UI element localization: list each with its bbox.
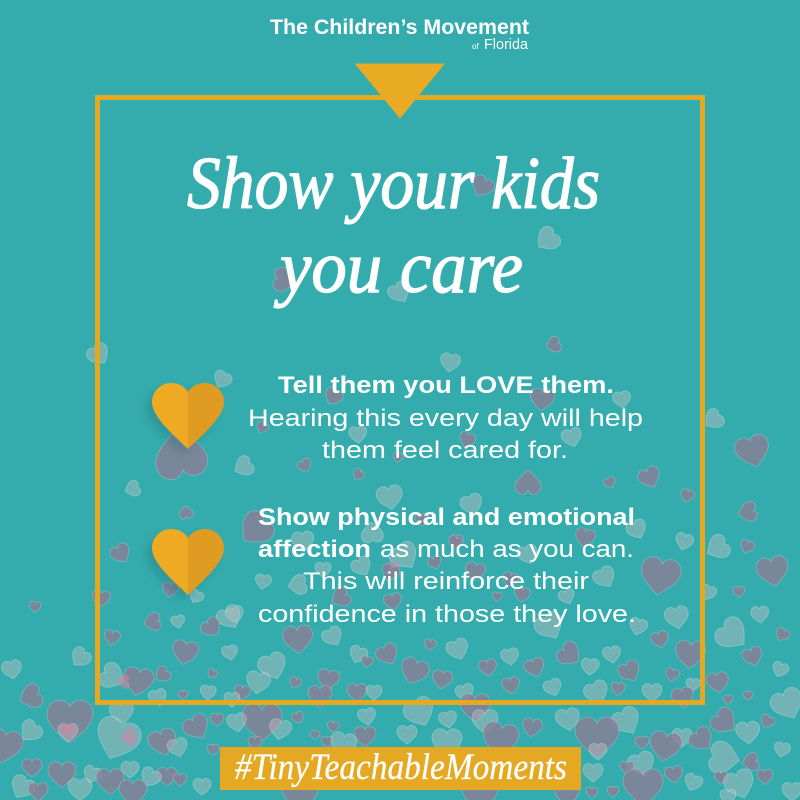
icon: gold paper heart 1 [146, 383, 224, 455]
logo: The Children's Movement of Florida: Florida [484, 36, 529, 53]
tip 1 text: Hearing this every day will help [248, 405, 643, 432]
hashtag banner: #TinyTeachableMoments [235, 747, 567, 788]
scattered paper hearts [0, 172, 800, 800]
icon: gold paper heart 2 [146, 529, 224, 601]
tip 2 text: Show physical and emotional [258, 504, 635, 531]
tip 2 text [258, 504, 636, 628]
tip 2 text: affection [258, 536, 371, 563]
tip 1 text: Tell them you LOVE them. [278, 372, 614, 399]
gold frame [98, 98, 702, 702]
tip 2 text: confidence in those they love. [258, 601, 636, 628]
tip 2 text: This will reinforce their [303, 568, 589, 595]
tip 1 text [248, 372, 643, 464]
title: Show your kids you care [187, 143, 600, 309]
gold triangle marker [354, 64, 445, 118]
tip 2 text: as much as you can. [380, 536, 634, 563]
logo: The Children's Movement of Florida: The Children’s Movement [270, 16, 529, 39]
logo: The Children's Movement of Florida [270, 16, 529, 53]
title: Show your kids you care: Show your kids [187, 143, 600, 225]
logo: The Children's Movement of Florida: of [472, 42, 479, 51]
title: Show your kids you care: you care [273, 227, 523, 309]
tip 1 text: them feel cared for. [322, 437, 568, 464]
